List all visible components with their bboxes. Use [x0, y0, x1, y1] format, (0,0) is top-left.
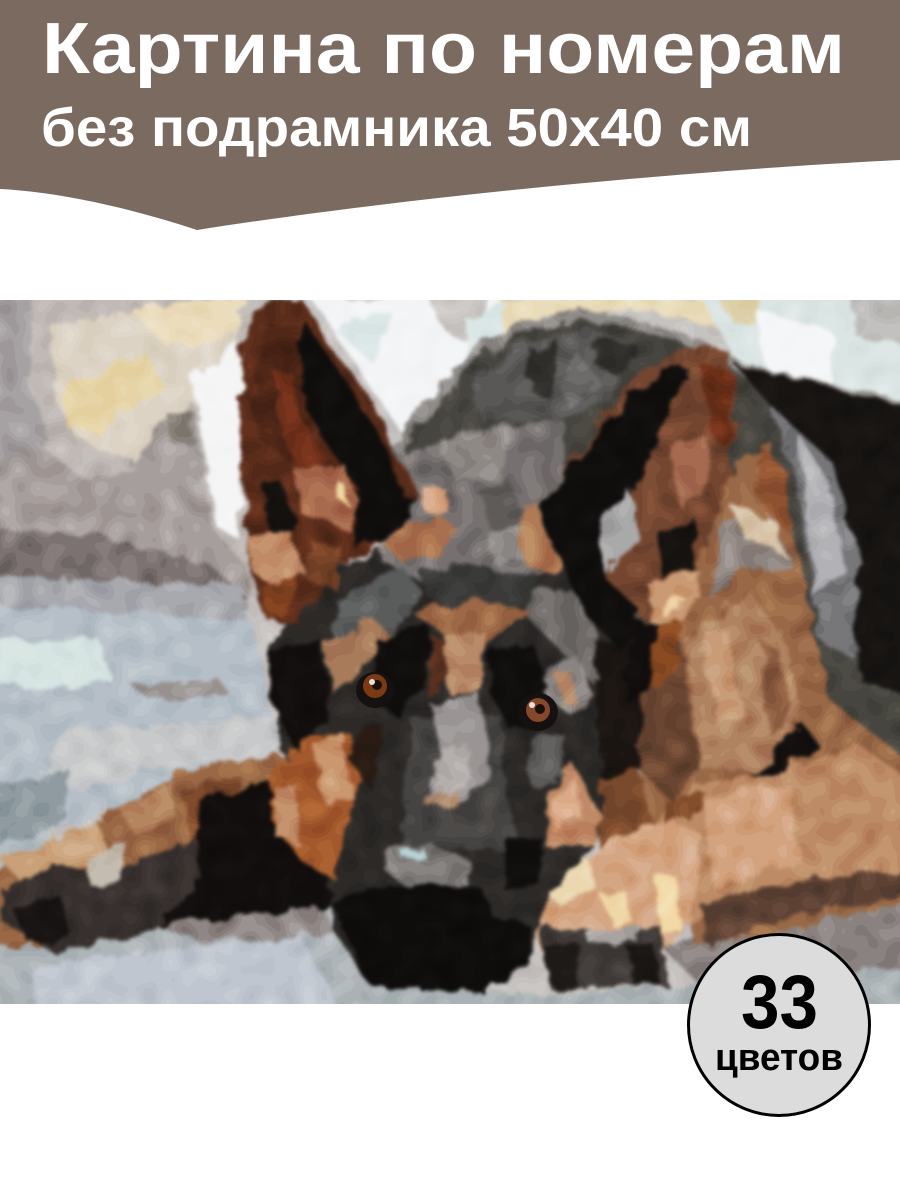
banner shape [0, 0, 900, 230]
badge circle [688, 934, 870, 1116]
eyes [356, 672, 558, 731]
chest and right leg [535, 440, 900, 988]
dog back and body [397, 313, 900, 780]
subtitle: без подрамника 50х40 см [41, 98, 752, 158]
left leg and paw [0, 755, 345, 950]
right ear [540, 343, 737, 700]
title: Картина по номерам [42, 9, 845, 89]
left ear [238, 298, 420, 625]
badge number: 33 [741, 960, 818, 1045]
dog head [267, 420, 650, 995]
badge label: цветов [715, 1037, 843, 1079]
painting: german shepherd [0, 300, 900, 1004]
paint texture [0, 300, 900, 1004]
badge: 33 colours [687, 933, 871, 1117]
background wall [0, 280, 900, 1020]
header banner [0, 0, 900, 230]
floor [0, 605, 900, 1020]
